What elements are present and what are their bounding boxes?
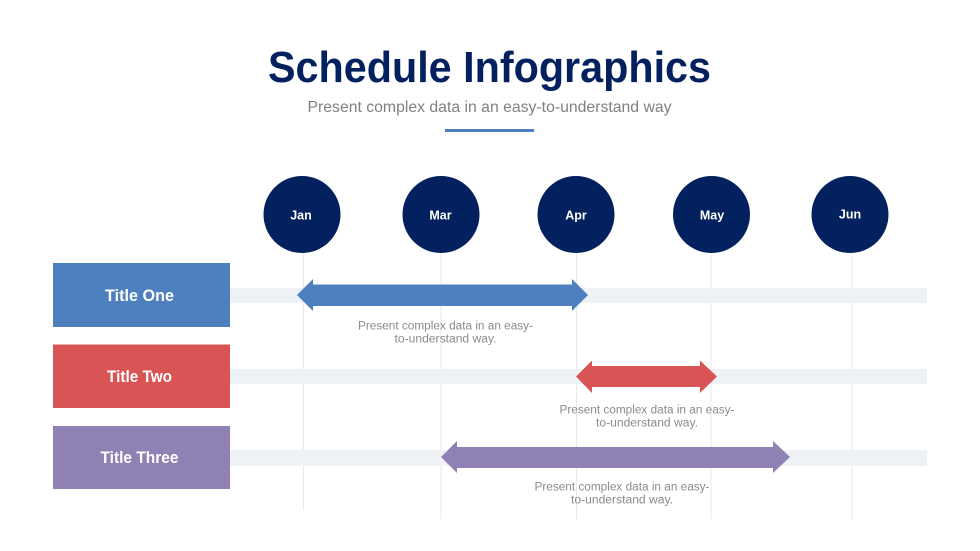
marker: Jun xyxy=(812,176,888,253)
marker: Jan: Jan xyxy=(290,208,312,222)
row: Title One xyxy=(53,263,927,346)
label text: Title Two xyxy=(107,367,172,386)
track xyxy=(230,450,927,466)
description xyxy=(358,320,533,346)
description xyxy=(534,482,710,506)
description: to-understand way. xyxy=(571,494,673,506)
double arrow xyxy=(441,441,790,473)
row: Title Three xyxy=(53,426,927,506)
description: Present complex data in an easy- xyxy=(358,320,533,332)
marker: May: May xyxy=(700,208,724,222)
row: Title Two xyxy=(53,344,927,430)
marker: Mar: Mar xyxy=(429,208,452,222)
month markers xyxy=(264,176,888,253)
description xyxy=(560,404,735,430)
marker: Apr xyxy=(538,176,614,253)
label box xyxy=(53,263,230,327)
description: Present complex data in an easy- xyxy=(560,404,735,416)
marker: Apr: Apr xyxy=(565,208,587,222)
double arrow xyxy=(297,279,588,311)
description: to-understand way. xyxy=(394,334,496,346)
marker: Mar xyxy=(402,176,480,253)
label text: Title Three xyxy=(100,448,178,467)
label box xyxy=(53,426,230,489)
marker: May xyxy=(673,176,750,253)
marker: Jan xyxy=(264,176,340,253)
double arrow xyxy=(576,360,717,393)
description: Present complex data in an easy- xyxy=(534,482,710,494)
marker: Jun: Jun xyxy=(839,208,861,222)
label box xyxy=(53,344,230,408)
title: Schedule Infographics xyxy=(268,43,711,92)
description: to-understand way. xyxy=(596,418,698,430)
subtitle: Present complex data in an easy-to-understand way xyxy=(308,99,672,116)
track xyxy=(230,369,927,384)
accent rule xyxy=(445,129,534,132)
label text: Title One xyxy=(105,286,174,305)
track xyxy=(230,288,927,303)
